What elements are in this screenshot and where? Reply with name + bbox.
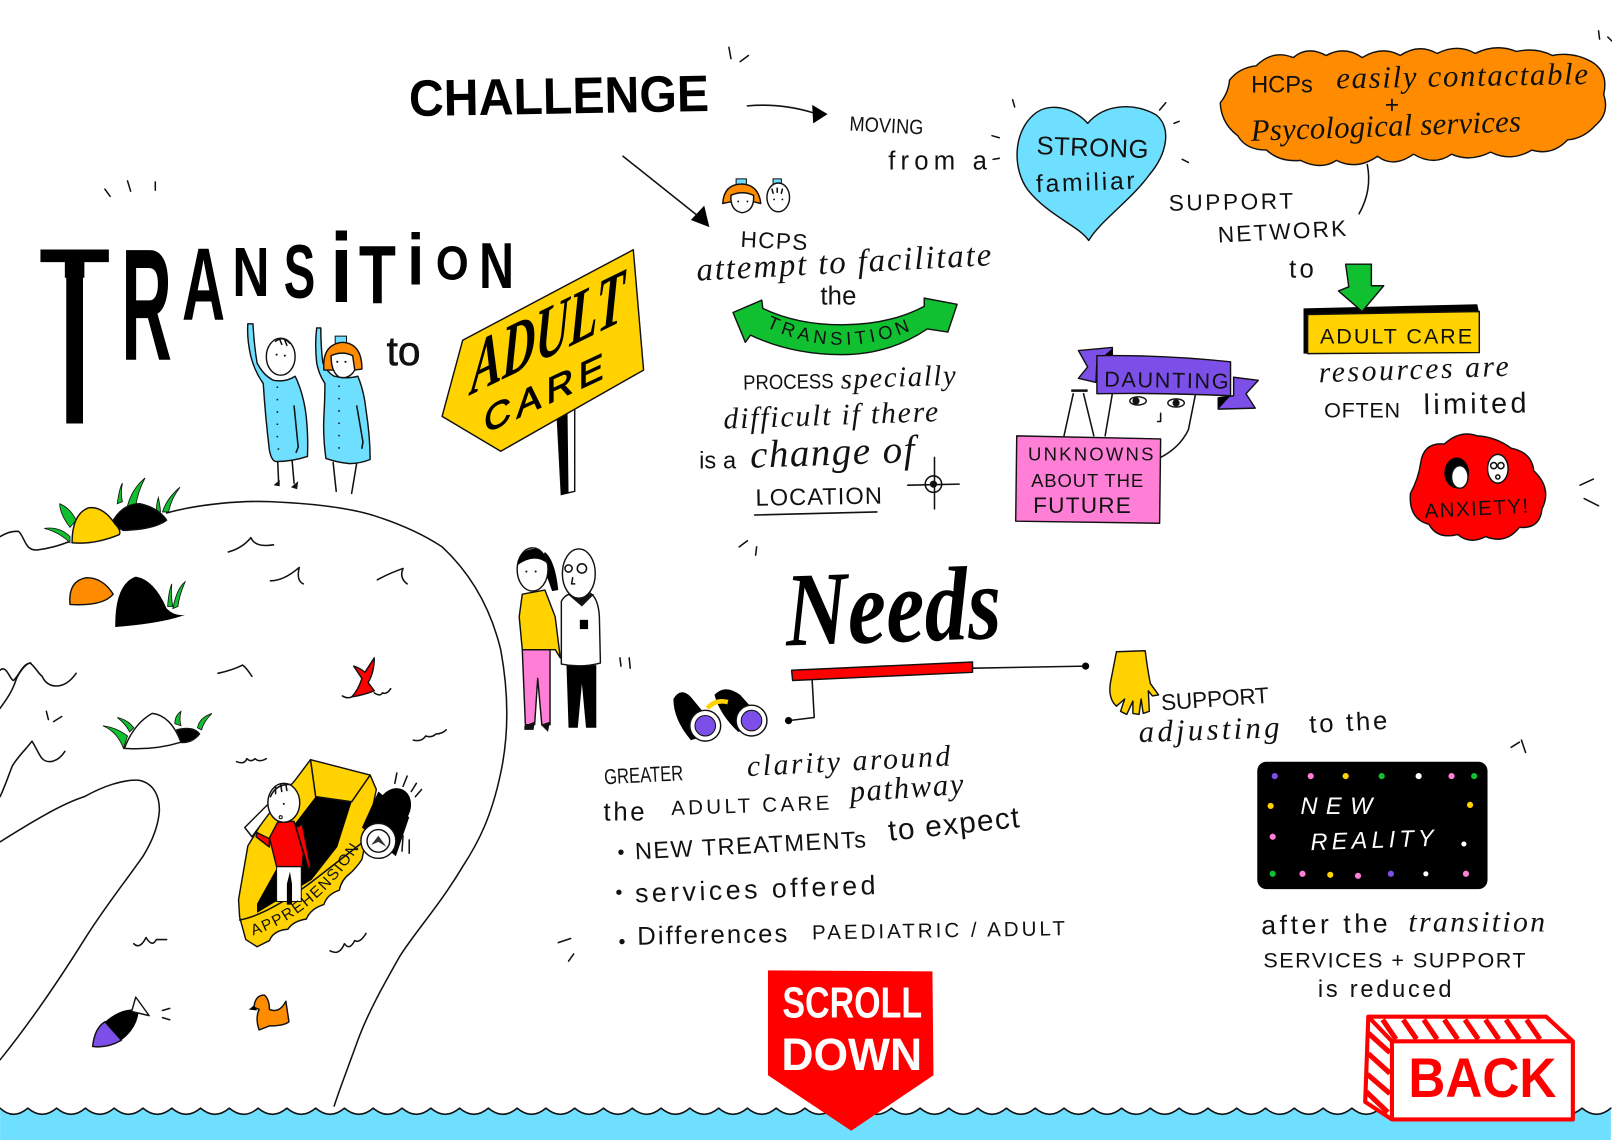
fish xyxy=(93,997,170,1047)
icon: HCP faces xyxy=(723,179,790,213)
text: after the transition: transition xyxy=(1408,905,1545,938)
text: after the transition xyxy=(1261,905,1545,1003)
figure: daunting and unknowns: DAUNTING xyxy=(1104,367,1229,394)
sign: adult care: CARE xyxy=(484,346,603,442)
text: greater clarity: the xyxy=(603,798,645,826)
text: greater clarity: pathway xyxy=(846,767,965,809)
figure: daunting and unknowns: ABOUT THE xyxy=(1031,470,1143,491)
banner: transition xyxy=(732,297,958,356)
arrow to HCPs xyxy=(623,156,709,227)
button: scroll down: SCROLL xyxy=(782,980,922,1028)
sea at bottom xyxy=(0,1108,1611,1140)
text: support adjusting: adjusting xyxy=(1138,710,1280,749)
text: support network to: SUPPORT xyxy=(1169,189,1294,216)
text: process specially difficult: is a xyxy=(699,449,737,475)
title: Transition: T xyxy=(359,230,396,321)
banner: transition: TRANSITION xyxy=(770,316,909,345)
title: Transition: A xyxy=(182,227,225,342)
heart: strong familiar: familiar xyxy=(1036,168,1135,198)
cloud: contactable HCPs xyxy=(1220,31,1612,214)
text: support network to xyxy=(1169,189,1347,284)
text: resources limited xyxy=(1318,350,1527,422)
red bar with connectors xyxy=(785,662,1089,724)
title sparks xyxy=(105,181,155,196)
text: support adjusting xyxy=(1138,683,1526,752)
heading: challenge: CHALLENGE xyxy=(408,64,710,127)
button: back box: BACK xyxy=(1408,1047,1556,1109)
text: HCPs attempt to facilitate the xyxy=(696,227,992,310)
black box: new reality: REALITY xyxy=(1310,826,1436,856)
text: support adjusting: to the xyxy=(1309,707,1388,739)
boat with boy: apprehension: APPREHENSION xyxy=(253,842,358,936)
button: scroll down xyxy=(768,970,933,1131)
text: support network to: NETWORK xyxy=(1217,216,1347,248)
title: Transition: S xyxy=(284,231,315,315)
figure: daunting and unknowns xyxy=(1016,347,1258,523)
button: back box xyxy=(1365,1017,1573,1119)
bullet list xyxy=(616,801,1066,951)
couple: man xyxy=(561,549,630,728)
title: Transition: R xyxy=(121,217,172,395)
arrow to moving xyxy=(747,105,828,123)
text: process specially difficult xyxy=(699,360,956,515)
cloud: contactable HCPs: + xyxy=(1385,92,1399,119)
black box: new reality xyxy=(1257,762,1488,889)
bullet list: to expect xyxy=(887,801,1022,848)
text: resources limited: resources are xyxy=(1318,350,1509,389)
text: HCPs attempt to facilitate the: HCPS xyxy=(740,227,808,255)
text: support network to: to xyxy=(1289,256,1314,284)
couple: woman xyxy=(517,548,560,732)
title: Transition: O xyxy=(436,236,469,290)
text: resources limited: OFTEN xyxy=(1324,397,1400,422)
figure: daunting and unknowns: UNKNOWNS xyxy=(1028,444,1153,465)
button: scroll down: DOWN xyxy=(781,1029,922,1080)
blob: anxiety xyxy=(1410,434,1599,540)
bullet list: Differences xyxy=(637,920,788,951)
sign: adult care xyxy=(442,250,644,494)
green arrow xyxy=(1338,264,1384,311)
text: HCPs attempt to facilitate the: attempt to facilitate xyxy=(696,237,992,289)
white mound with grass xyxy=(103,711,212,749)
duck xyxy=(249,995,289,1030)
small waves xyxy=(46,538,446,952)
bullet list: PAEDIATRIC / ADULT xyxy=(812,917,1066,945)
text: resources limited: limited xyxy=(1423,387,1527,421)
figure: daunting and unknowns: FUTURE xyxy=(1033,493,1131,518)
box: adult care: ADULT CARE xyxy=(1320,323,1472,348)
title: Transition: i xyxy=(407,220,424,301)
nurse figure right xyxy=(316,328,370,493)
heart: strong familiar: STRONG xyxy=(1036,132,1149,164)
bullet list: services offered xyxy=(635,870,876,909)
title: Transition: T xyxy=(39,195,110,477)
heart: strong familiar xyxy=(992,100,1188,241)
box: adult care xyxy=(1304,304,1479,354)
text: greater clarity: ADULT CARE xyxy=(671,792,830,820)
challenge sparks xyxy=(729,47,748,62)
text: support adjusting: SUPPORT xyxy=(1160,683,1270,715)
boat with boy: apprehension xyxy=(238,758,422,948)
title: Transition: i xyxy=(330,214,353,324)
text: process specially difficult: LOCATION xyxy=(755,484,882,512)
title: Transition: N xyxy=(232,233,270,312)
title: Transition: N xyxy=(479,230,514,303)
title: Transition xyxy=(37,195,514,477)
text: greater clarity: clarity around xyxy=(746,739,951,783)
black box: new reality: NEW xyxy=(1300,794,1375,820)
cloud: contactable HCPs: HCPs xyxy=(1251,73,1313,99)
text: greater clarity xyxy=(603,739,965,826)
heading: needs: Needs xyxy=(782,544,1003,669)
text: HCPs attempt to facilitate the: the xyxy=(820,282,856,310)
sign: adult care: ADULT xyxy=(468,252,627,413)
sparks near list xyxy=(558,939,574,961)
text: process specially difficult: PROCESS xyxy=(743,370,834,395)
text: process specially difficult: change of xyxy=(749,428,920,477)
mounds second row xyxy=(70,577,185,627)
text: process specially difficult: specially xyxy=(840,360,956,396)
icon: location crosshair xyxy=(908,457,959,509)
sparks above needs xyxy=(739,541,757,555)
text: moving from a: MOVING xyxy=(849,113,924,139)
hill outline xyxy=(0,501,507,1106)
text: after the transition: SERVICES + SUPPORT xyxy=(1263,947,1526,972)
text: moving from a: from a xyxy=(888,148,988,176)
mounds top with grass xyxy=(44,478,180,543)
nurse figure left xyxy=(248,324,308,489)
blob: anxiety: ANXIETY! xyxy=(1424,495,1529,523)
icon: yellow hand xyxy=(1110,651,1159,714)
cloud: contactable HCPs: Psycological services xyxy=(1249,104,1522,148)
title: to: to xyxy=(387,328,421,374)
red tail in the water xyxy=(342,658,391,698)
text: moving from a xyxy=(849,113,988,176)
cloud: contactable HCPs: easily contactable xyxy=(1336,57,1588,95)
text: greater clarity: GREATER xyxy=(603,760,684,789)
text: process specially difficult: difficult if there xyxy=(723,395,939,436)
text: after the transition: after the xyxy=(1261,908,1388,940)
text: after the transition: is reduced xyxy=(1318,977,1452,1003)
icon: binoculars xyxy=(673,689,767,741)
bullet list: NEW TREATMENTs xyxy=(634,827,867,865)
